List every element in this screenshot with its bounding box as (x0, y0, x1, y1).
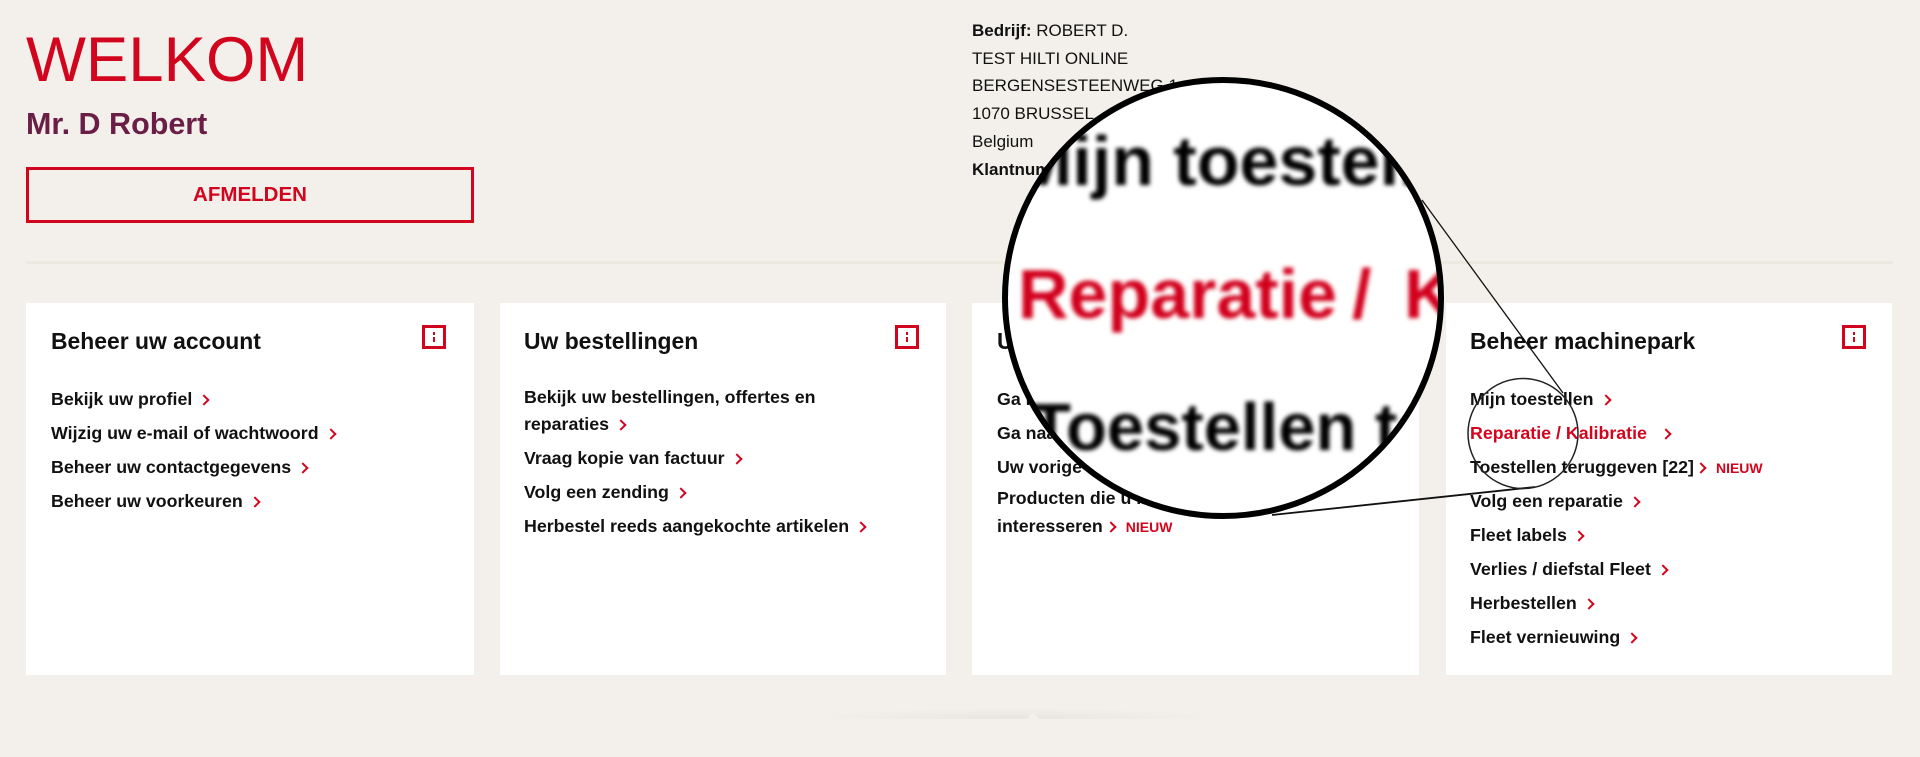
card 4 content: Fleet vernieuwing (1470, 627, 1620, 647)
title: welkom: WELKOM (26, 25, 308, 95)
user name: Mr. D Robert (26, 107, 207, 141)
card 2 content: Bekijk uw bestellingen, offertes en (524, 386, 816, 406)
card 2 content: Vraag kopie van factuur (524, 448, 725, 468)
card 1 content (51, 325, 446, 511)
card 4 content: Fleet labels (1470, 525, 1567, 545)
card 1 content: Beheer uw voorkeuren (51, 491, 243, 511)
logout button (26, 167, 474, 223)
card 3 content: Uw winkelwagen (997, 328, 1179, 354)
magnifier lens (1002, 77, 1444, 519)
card 3 content: Producten die u kunnen (997, 488, 1200, 508)
card 3 content (997, 328, 1200, 536)
small selection circle (1468, 378, 1578, 488)
card 3 content: Uw vorige artikelen (997, 457, 1160, 477)
company address block: TEST HILTI ONLINE (972, 48, 1128, 68)
panel: beheer uw account (26, 303, 474, 675)
magnifier lens: Mijn toestellen (1014, 122, 1500, 200)
panel: third card (972, 303, 1419, 675)
company address block: BERGENSESTEENWEG 1 (972, 76, 1178, 95)
panel: beheer machinepark (1446, 303, 1892, 675)
company address block (972, 21, 1178, 178)
card 1 content: Wijzig uw e-mail of wachtwoord (51, 423, 319, 443)
magnifier lens: Toestellen teruggeven (1030, 390, 1736, 465)
bottom scroll shadow (810, 697, 1220, 719)
card 4 content (1470, 325, 1866, 647)
panel: uw bestellingen (500, 303, 946, 675)
card 4 content: Volg een reparatie (1470, 491, 1623, 511)
company address block: Belgium (972, 132, 1033, 151)
company address block: Bedrijf: ROBERT D. (972, 21, 1128, 40)
card 4 content: Herbestellen (1470, 593, 1577, 613)
company address block: 1070 BRUSSEL (972, 104, 1094, 123)
connector lines (1272, 200, 1563, 515)
card 3 content: Ga naar winkelwagen (997, 389, 1178, 409)
magnifier overlay and bottom shadow (950, 77, 1579, 719)
card 3 content: Ga naar favorieten (997, 423, 1153, 443)
card 2 content: reparaties (524, 414, 609, 434)
card 2 content: Herbestel reeds aangekochte artikelen (524, 516, 849, 536)
card 1 content: Beheer uw contactgegevens (51, 457, 291, 477)
logout button: AFMELDEN (193, 183, 307, 206)
card 3 content: interesseren NIEUW (997, 516, 1172, 536)
card 4 content: Toestellen teruggeven [22] NIEUW (1470, 457, 1763, 477)
magnifier lens: K (1404, 255, 1455, 333)
card 4 content: Reparatie / Kalibratie (1470, 423, 1647, 443)
magnifier lens: / (1352, 255, 1371, 333)
company address block: Klantnummer: (972, 160, 1087, 178)
card 4 content: Mijn toestellen (1470, 389, 1594, 409)
card 4 content: Beheer machinepark (1470, 328, 1695, 354)
magnifier lens: Reparatie (1018, 255, 1337, 333)
card 1 content: Beheer uw account (51, 328, 261, 354)
card 1 content: Bekijk uw profiel (51, 389, 192, 409)
card 2 content: Volg een zending (524, 482, 669, 502)
card 2 content: Uw bestellingen (524, 328, 698, 354)
card 2 content (524, 325, 919, 536)
card 4 content: Verlies / diefstal Fleet (1470, 559, 1651, 579)
